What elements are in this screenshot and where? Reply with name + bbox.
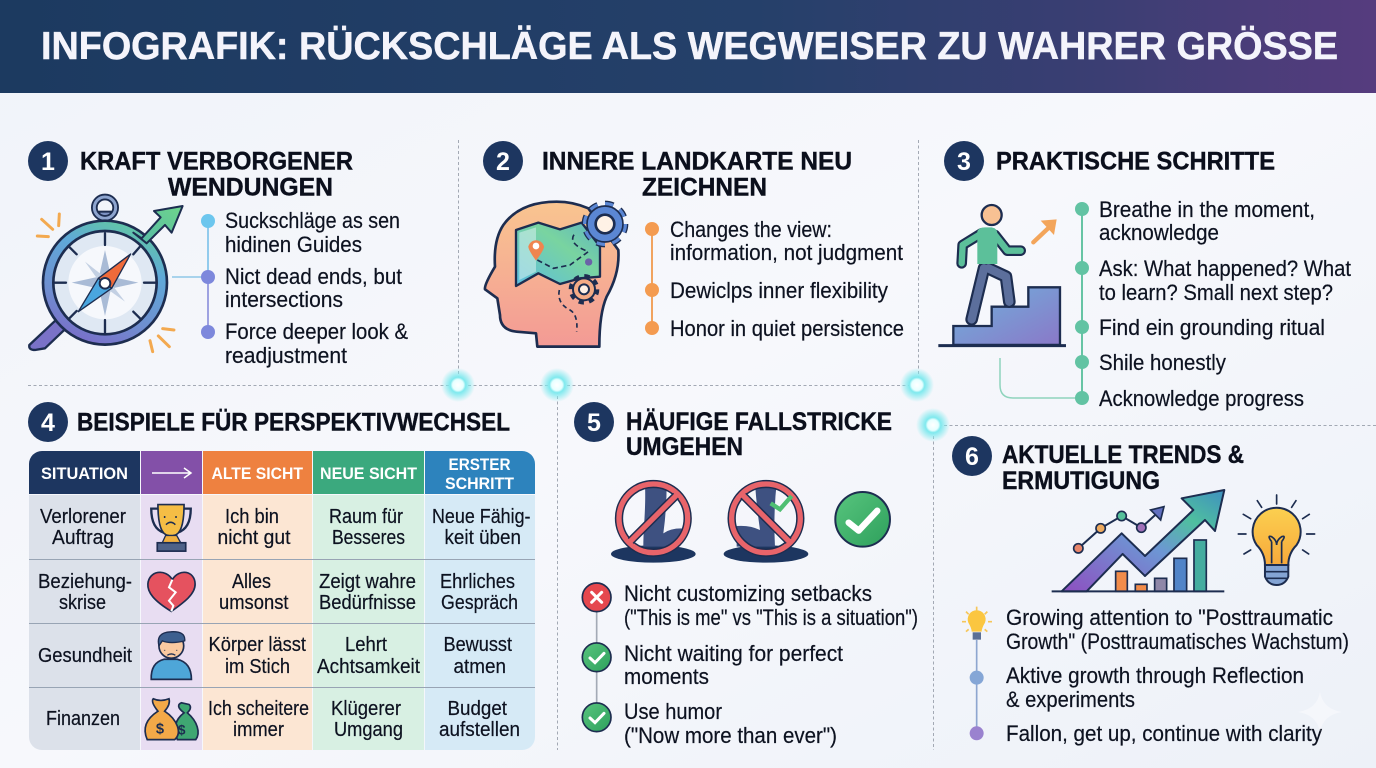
- heading 4: BEISPIELE FÜR PERSPEKTIVWECHSEL: [77, 408, 510, 436]
- list 3: Breathe in the moment,: [1099, 197, 1315, 222]
- table column: new view: Raum für: [329, 506, 403, 528]
- table header: NEUE SICHT: [320, 464, 418, 483]
- heading 2: ZEICHNEN: [642, 174, 767, 202]
- list 3: Acknowledge progress: [1099, 386, 1304, 411]
- table column: first step: Bewusst: [444, 634, 512, 656]
- table column: new view: Lehrt: [345, 634, 387, 656]
- list 1: Suckschläge as sen: [225, 208, 400, 233]
- heading 2: [542, 148, 852, 202]
- list 6: & experiments: [1006, 687, 1135, 712]
- number badge 3: 3: [957, 148, 971, 176]
- number badge 5: 5: [587, 409, 601, 437]
- table: [29, 451, 535, 750]
- table column: first step: atmen: [454, 656, 506, 678]
- table column: first step: Ehrliches: [440, 571, 515, 593]
- table header: SITUATION: [41, 464, 128, 483]
- timeline 3: [1075, 202, 1089, 405]
- timeline 5: [582, 583, 611, 732]
- table column: first step: Neue Fähig-: [432, 506, 530, 528]
- list 5: [624, 581, 918, 748]
- table column: situation: skrise: [59, 592, 106, 614]
- table column: new view: Klügerer: [331, 698, 401, 720]
- table column: situation: Gesundheit: [38, 645, 132, 667]
- table column: old view: Ich scheitere: [208, 698, 309, 720]
- list 5: Nicht waiting for perfect: [624, 641, 843, 666]
- number badge 4: [28, 402, 68, 442]
- panel 5: Häufige Fallstricke umgehen: [574, 402, 918, 748]
- icon: person climbing stairs: [938, 205, 1066, 346]
- list 6: [1006, 605, 1349, 746]
- timeline 6: [962, 607, 992, 740]
- list 3: Shile honestly: [1099, 350, 1226, 375]
- list 6: Fallon, get up, continue with clarity: [1006, 721, 1322, 746]
- icon: light bulb: [1238, 495, 1315, 585]
- icon: money bags: [145, 699, 198, 740]
- panel 6: Aktuelle Trends und Ermutigung: [952, 436, 1349, 746]
- list 1: readjustment: [225, 343, 347, 368]
- header banner: [0, 0, 1376, 93]
- table column: first step: Gespräch: [441, 592, 518, 614]
- table column: new view: Umgang: [334, 719, 403, 741]
- list 5: moments: [624, 664, 709, 689]
- icon: person with health issue: [151, 632, 191, 679]
- table column: first step: keit üben: [444, 527, 521, 549]
- list 3: Find ein grounding ritual: [1099, 315, 1325, 340]
- heading 6: ERMUTIGUNG: [1002, 467, 1160, 495]
- table header: ERSTER: [448, 455, 510, 474]
- number badge 6: [952, 436, 992, 476]
- list 2: Honor in quiet persistence: [670, 316, 904, 341]
- table column: new view: Besseres: [332, 527, 405, 549]
- heading 1: [80, 148, 353, 202]
- list 2: Dewiclps inner flexibility: [670, 278, 888, 303]
- list 1: hidinen Guides: [225, 232, 362, 257]
- table column: old view: im Stich: [225, 656, 290, 678]
- table header: SCHRITT: [445, 474, 515, 493]
- table column: situation: Auftrag: [52, 527, 114, 549]
- table column: old view: Ich bin: [225, 506, 279, 528]
- list 1: Force deeper look &: [225, 319, 408, 344]
- list 5: ("Now more than ever"): [624, 723, 837, 748]
- list 3: acknowledge: [1099, 220, 1219, 245]
- icons: prohibited signs and check: [611, 483, 890, 563]
- table column: icons: [145, 505, 198, 740]
- list 6: Aktive growth through Reflection: [1006, 663, 1304, 688]
- title: INFOGRAFIK: RÜCKSCHLÄGE ALS WEGWEISER ZU WAHRER GRÖSSE: [41, 25, 1338, 68]
- list 1: intersections: [225, 287, 343, 312]
- timeline 1: [172, 214, 215, 339]
- number badge 3: [944, 141, 984, 181]
- number badge 5: [574, 402, 614, 442]
- list 3: [1099, 197, 1351, 411]
- number badge 2: [483, 141, 523, 181]
- connector: [1000, 358, 1082, 398]
- icon: prohibited step 2: [724, 483, 808, 563]
- table column: first step: [432, 506, 530, 741]
- list 2: information, not judgment: [670, 240, 903, 265]
- panel 3: Praktische Schritte: [938, 141, 1351, 411]
- table header: ALTE SICHT: [212, 464, 304, 483]
- list 3: to learn? Small next step?: [1099, 280, 1333, 305]
- panel 2: Innere Landkarte neu zeichnen: [483, 141, 904, 347]
- table column: first step: Budget: [448, 698, 507, 720]
- table column: situation: Finanzen: [46, 708, 120, 730]
- number badge 4: 4: [41, 409, 55, 437]
- list 2: [670, 217, 904, 341]
- number badge 6: 6: [965, 443, 979, 471]
- icon: prohibited step 1: [611, 483, 696, 563]
- number badge 1: [28, 141, 68, 181]
- table column: new view: Zeigt wahre: [319, 571, 416, 593]
- list 6: Growing attention to "Posttraumatic: [1006, 605, 1333, 630]
- icon: sad trophy: [151, 505, 191, 551]
- table column: old view: nicht gut: [218, 527, 291, 549]
- table column: old view: [208, 506, 309, 741]
- number badge 2: 2: [496, 148, 510, 176]
- list 2: Changes the view:: [670, 217, 832, 242]
- heading 1: KRAFT VERBORGENER: [80, 148, 353, 176]
- timeline 2: [645, 222, 659, 335]
- table column: old view: immer: [233, 719, 284, 741]
- table column: situation: [38, 506, 132, 730]
- heading 5: UMGEHEN: [626, 433, 743, 461]
- number badge 1: 1: [41, 148, 55, 176]
- panel 4: Beispiele für Perspektivwechsel: [28, 402, 535, 750]
- list 1: [225, 208, 408, 368]
- icon: money bags: $: [178, 722, 186, 737]
- icon: head with map and gears: [485, 202, 624, 347]
- heading 1: WENDUNGEN: [168, 174, 333, 202]
- chart: growth arrow and bars: [1052, 490, 1224, 591]
- table column: old view: Körper lässt: [208, 634, 306, 656]
- icon: compass with arrow: [29, 197, 183, 352]
- table column: first step: aufstellen: [439, 719, 520, 741]
- list 3: Ask: What happened? What: [1099, 256, 1351, 281]
- table column: new view: [317, 506, 420, 741]
- list 1: Nict dead ends, but: [225, 264, 402, 289]
- table column: new view: Bedürfnisse: [319, 592, 416, 614]
- heading 3: PRAKTISCHE SCHRITTE: [996, 148, 1275, 176]
- heading 5: HÄUFIGE FALLSTRICKE: [626, 408, 892, 436]
- table column: situation: Verlorener: [40, 506, 126, 528]
- icon: broken heart: [148, 572, 195, 611]
- list 5: ("This is me" vs "This is a situation"): [624, 605, 918, 630]
- heading 6: AKTUELLE TRENDS &: [1002, 441, 1244, 469]
- heading 6: [1002, 441, 1244, 495]
- table column: old view: umsonst: [219, 592, 289, 614]
- list 5: Nicht customizing setbacks: [624, 581, 872, 606]
- icon: money bags: $: [156, 722, 164, 738]
- table column: old view: Alles: [232, 571, 271, 593]
- icon: green check: [835, 492, 890, 547]
- table column: situation: Beziehung-: [38, 571, 132, 593]
- table column: new view: Achtsamkeit: [317, 656, 420, 678]
- list 5: Use humor: [624, 699, 722, 724]
- heading 2: INNERE LANDKARTE NEU: [542, 148, 852, 176]
- heading 5: [626, 408, 892, 461]
- table header: [41, 455, 515, 493]
- panel 1: Kraft verborgener Wendungen: [28, 141, 408, 368]
